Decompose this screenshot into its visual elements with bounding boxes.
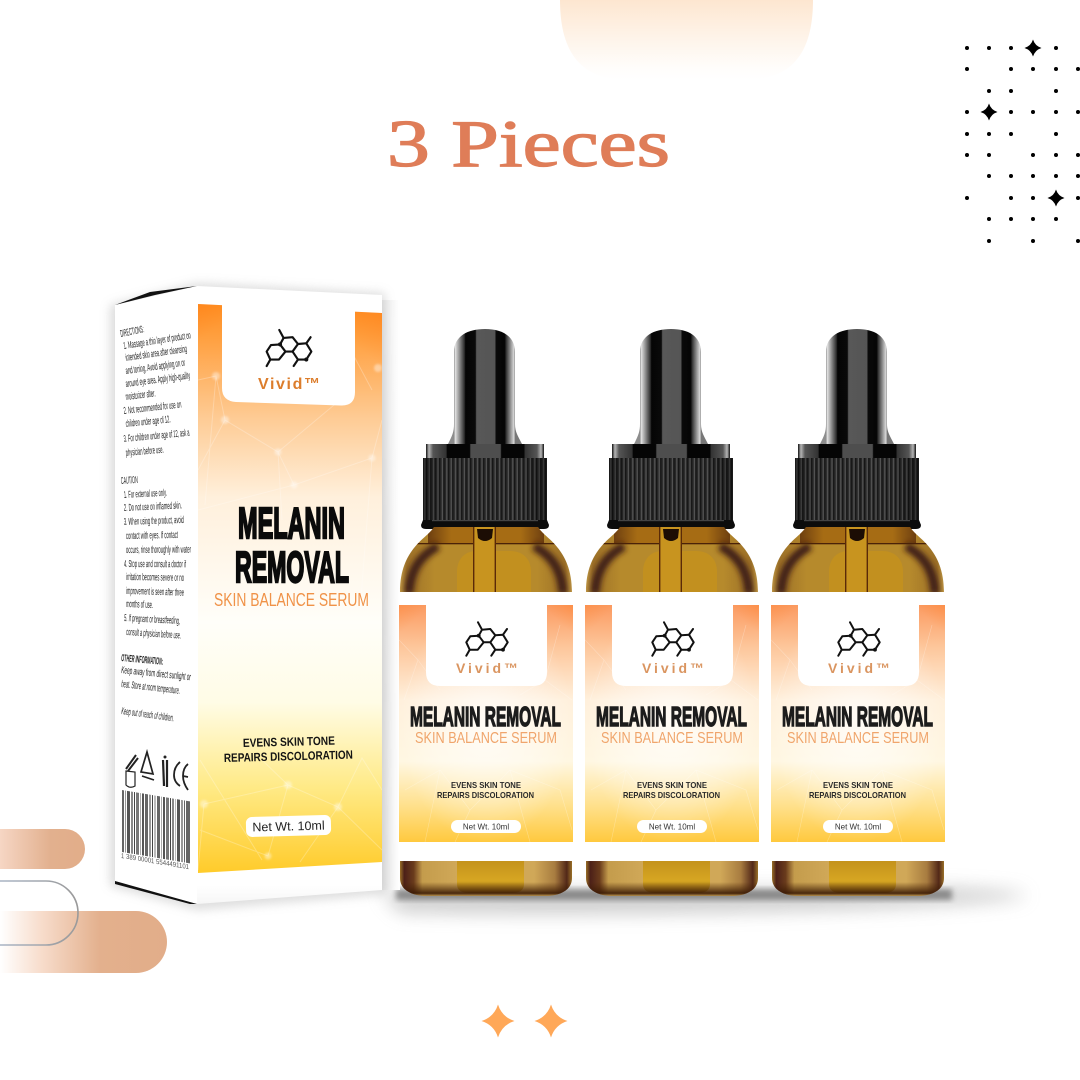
bottle 2 benefits: REPAIRS DISCOLORATION	[623, 790, 720, 800]
product box: irritation becomes severe or no	[126, 572, 184, 584]
box side directions text: OTHER INFORMATION:	[121, 653, 164, 668]
box side directions text: 1. For external use only.	[124, 488, 167, 501]
product box: 4. Stop use and consult a doctor if	[124, 559, 186, 570]
box product name: MELANIN	[238, 499, 345, 548]
bottle 3 benefits: REPAIRS DISCOLORATION	[809, 790, 906, 800]
bottle 1 benefits	[437, 780, 534, 800]
box brand name: Vivid™	[258, 376, 320, 393]
bottle 3 benefits: EVENS SKIN TONE	[823, 780, 893, 790]
product box	[106, 280, 390, 913]
bottle 1 brand name: Vivid™	[456, 660, 518, 676]
box top edge	[115, 286, 197, 305]
box benefits: REPAIRS DISCOLORATION	[224, 748, 353, 765]
bottle 2 benefits: EVENS SKIN TONE	[637, 780, 707, 790]
box net weight pill: Net Wt. 10ml	[252, 819, 325, 834]
bottle 3 logo icon	[838, 622, 880, 656]
bottle 2 benefits	[623, 780, 720, 800]
bottle 2 product name: MELANIN REMOVAL	[596, 701, 747, 732]
bottle 3 brand name: Vivid™	[828, 660, 890, 676]
box side directions text: DIRECTIONS:	[119, 324, 145, 340]
product box: consult a physician before use.	[126, 627, 181, 642]
bottle 2 net weight: Net Wt. 10ml	[649, 822, 695, 832]
bottle 3	[733, 329, 983, 896]
bottle 1 benefits: EVENS SKIN TONE	[451, 780, 521, 790]
box side directions text: moisturizer after.	[125, 388, 156, 403]
product box: 2. Not recommended for use on	[123, 399, 182, 417]
product box: 3. For children under age of 12, ask a	[123, 428, 190, 445]
product box: heat. Store at room temperature.	[121, 679, 181, 697]
box logo tab	[222, 300, 355, 406]
box side directions text: months of use.	[126, 599, 153, 611]
bottle 3 net weight: Net Wt. 10ml	[835, 822, 881, 832]
box logo icon	[267, 330, 311, 366]
box side directions text: CAUTION	[121, 475, 138, 487]
bottle 2 brand name: Vivid™	[642, 660, 704, 676]
barcode: 1 389 00001 5544491101	[121, 853, 189, 871]
box side shadow	[382, 300, 400, 890]
box product name: REMOVAL	[235, 543, 349, 592]
barcode	[121, 790, 190, 871]
bottle 1 body	[361, 329, 611, 896]
bottle 3 benefits	[809, 780, 906, 800]
box net weight pill	[246, 815, 331, 837]
product box: 5. If pregnant or breastfeeding,	[124, 613, 180, 627]
box side directions text: physician before use.	[125, 445, 164, 459]
bottle 1 product name: MELANIN REMOVAL	[410, 701, 561, 732]
bottle 2 subtitle: SKIN BALANCE SERUM	[601, 730, 743, 747]
box artwork	[198, 304, 382, 873]
bottle 1 subtitle: SKIN BALANCE SERUM	[415, 730, 557, 747]
bottle 3 product name: MELANIN REMOVAL	[782, 701, 933, 732]
bottle 2	[547, 329, 797, 896]
box front face	[197, 286, 382, 904]
product box: intended skin area after cleansing	[125, 344, 188, 364]
product box: Keep away from direct sunlight or	[121, 665, 192, 683]
bottle 2 logo icon	[652, 622, 694, 656]
bottle 2 body	[547, 329, 797, 896]
box compliance icons	[126, 752, 188, 790]
product box: occurs, rinse thoroughly with water	[126, 545, 191, 556]
box benefits	[224, 734, 353, 765]
product box: and toning. Avoid applying on or	[125, 358, 186, 377]
box product name	[235, 499, 349, 592]
box side directions text: contact with eyes. If contact	[126, 530, 178, 542]
box drop shadow	[110, 283, 387, 910]
product box: 3. When using the product, avoid	[124, 515, 184, 528]
product box: improvement is seen after three	[126, 586, 184, 599]
title: 3 Pieces	[387, 107, 670, 181]
bottle 1 net weight: Net Wt. 10ml	[463, 822, 509, 832]
bottle 3 body	[733, 329, 983, 896]
box side face	[115, 286, 197, 904]
box benefits: EVENS SKIN TONE	[243, 734, 335, 750]
box side directions text	[119, 324, 192, 724]
bottle 1	[361, 329, 611, 896]
bottle floor shadow	[382, 888, 1026, 914]
bottle 1 logo icon	[466, 622, 508, 656]
box subtitle: SKIN BALANCE SERUM	[214, 590, 369, 610]
product box: 2. Do not use on inflamed skin.	[124, 500, 182, 514]
decorative pills bottom left	[0, 829, 167, 973]
product box: 1. Massage a thin layer of product on	[123, 330, 192, 352]
bottle 1 benefits: REPAIRS DISCOLORATION	[437, 790, 534, 800]
top decorative arc	[560, 0, 813, 80]
product box: around eye area. Apply high-quality	[125, 371, 191, 390]
dot and star grid	[965, 40, 1080, 243]
box bottom edge	[115, 881, 197, 904]
bottle 3 subtitle: SKIN BALANCE SERUM	[787, 730, 929, 747]
box side directions text: children under age of 12.	[125, 414, 171, 430]
bottom stars	[482, 1004, 568, 1038]
box side directions text: Keep out of reach of children.	[121, 706, 175, 724]
